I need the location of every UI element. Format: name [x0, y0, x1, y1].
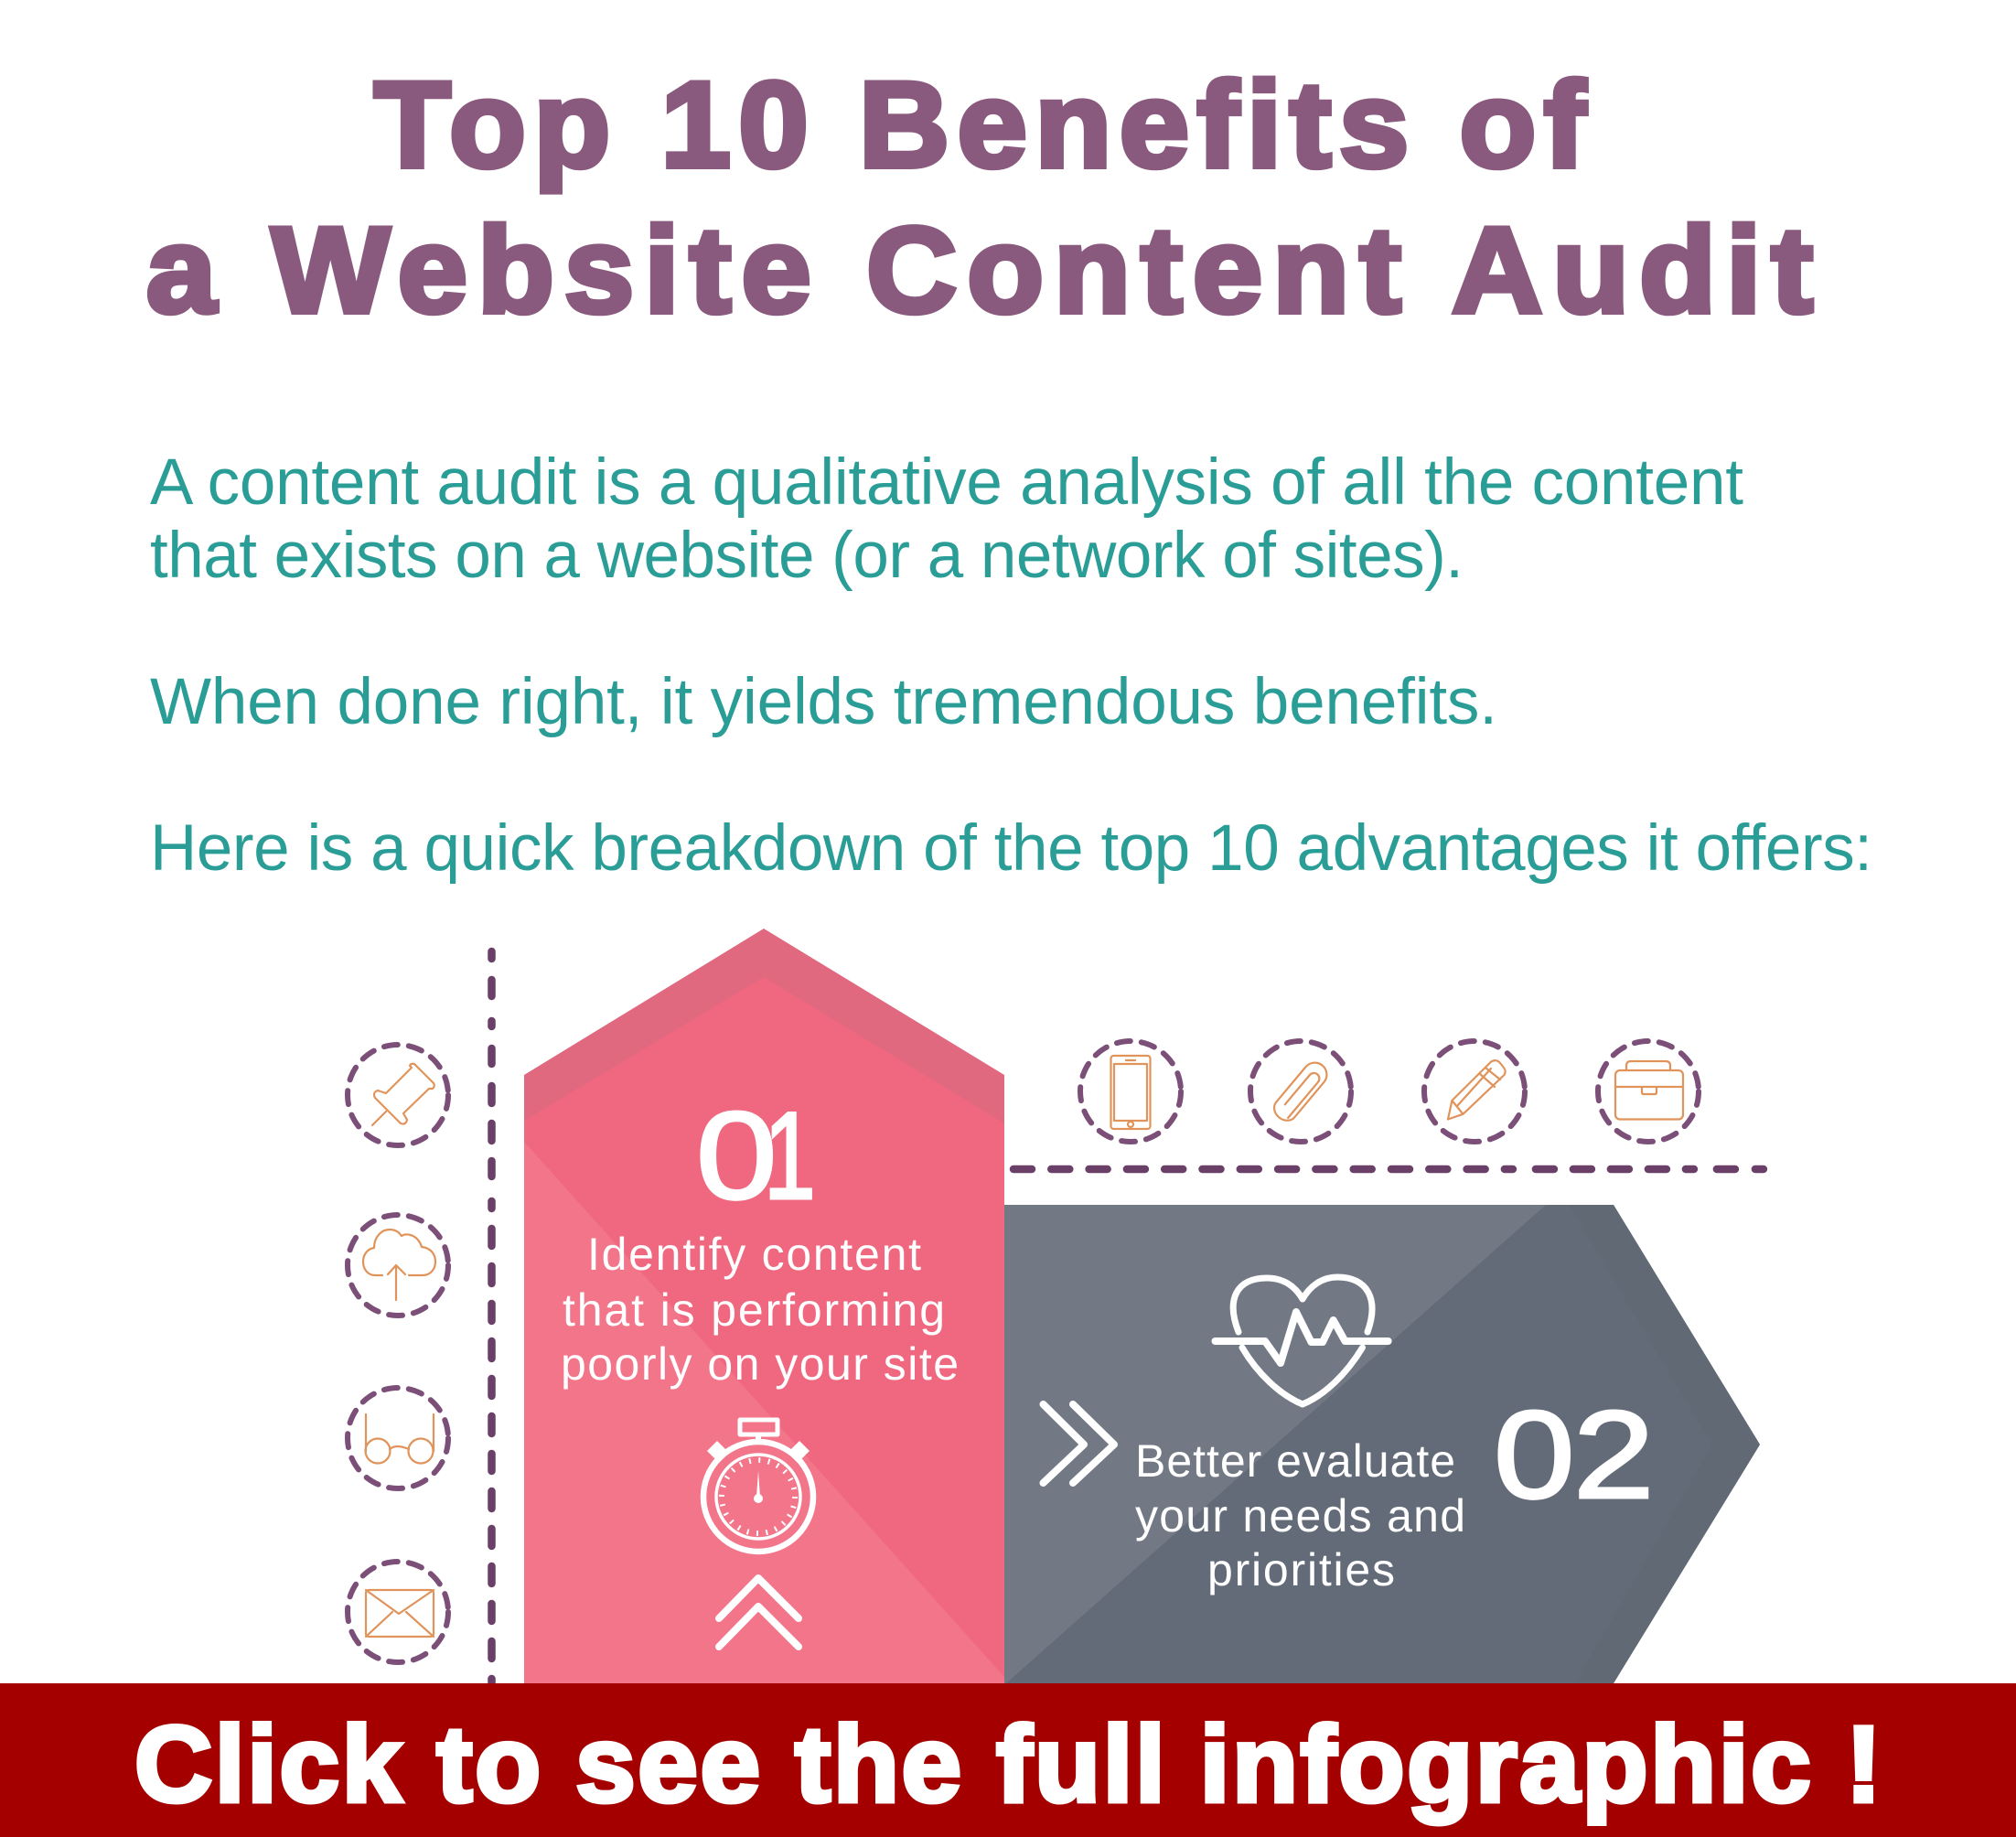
title: Top 10 Benefits of — [374, 57, 1587, 193]
icon: cloud upload — [348, 1215, 448, 1316]
intro text block: When done right, it yields tremendous benefits. — [150, 666, 1497, 738]
banner: call to action: Click to see the full infographic ! — [134, 1704, 1882, 1825]
banner: call to action — [0, 1683, 2016, 1837]
icon: push pin — [348, 1045, 448, 1145]
step 02 description — [1135, 1435, 1465, 1595]
icon: stopwatch — [703, 1420, 813, 1552]
number 02: 0 — [1494, 1386, 1574, 1524]
step 01 description — [561, 1229, 959, 1390]
number 01: 0 — [696, 1087, 777, 1225]
step 01 description: that is performing — [563, 1284, 945, 1336]
icon: smartphone — [1080, 1041, 1181, 1142]
icon: glasses — [348, 1388, 448, 1488]
panel: step 01 pink arrow — [524, 929, 1004, 1683]
icon: envelope — [348, 1562, 448, 1662]
icon: double right chevron — [1043, 1404, 1114, 1483]
intro text block: Here is a quick breakdown of the top 10 advantages it offers: — [150, 812, 1872, 885]
intro text block: that exists on a website (or a network of sites). — [150, 520, 1464, 592]
number 02 — [1494, 1386, 1654, 1524]
intro text block: A content audit is a qualitative analysis of all the content — [150, 446, 1743, 519]
panel: step 02 grey arrow — [1004, 1205, 1760, 1683]
icon: paperclip — [1250, 1041, 1351, 1142]
number 01: 1 — [764, 1087, 816, 1225]
icon: briefcase — [1598, 1041, 1699, 1142]
step 01 description: Identify content — [587, 1229, 921, 1280]
title — [146, 57, 1813, 338]
step 02 description: your needs and — [1135, 1490, 1465, 1542]
intro text block — [150, 446, 1872, 885]
number 02: 2 — [1573, 1386, 1654, 1524]
vertical dashed divider — [488, 951, 496, 1685]
horizontal dashed divider — [1013, 1166, 1765, 1173]
step 02 description: priorities — [1207, 1544, 1395, 1595]
number 01 — [696, 1087, 816, 1225]
step 02 description: Better evaluate — [1135, 1435, 1455, 1487]
icon: pencil — [1424, 1041, 1525, 1142]
icon: heart with pulse — [1215, 1277, 1389, 1404]
title: a Website Content Audit — [146, 202, 1813, 338]
icon: double up chevron — [719, 1578, 799, 1647]
step 01 description: poorly on your site — [561, 1338, 959, 1390]
